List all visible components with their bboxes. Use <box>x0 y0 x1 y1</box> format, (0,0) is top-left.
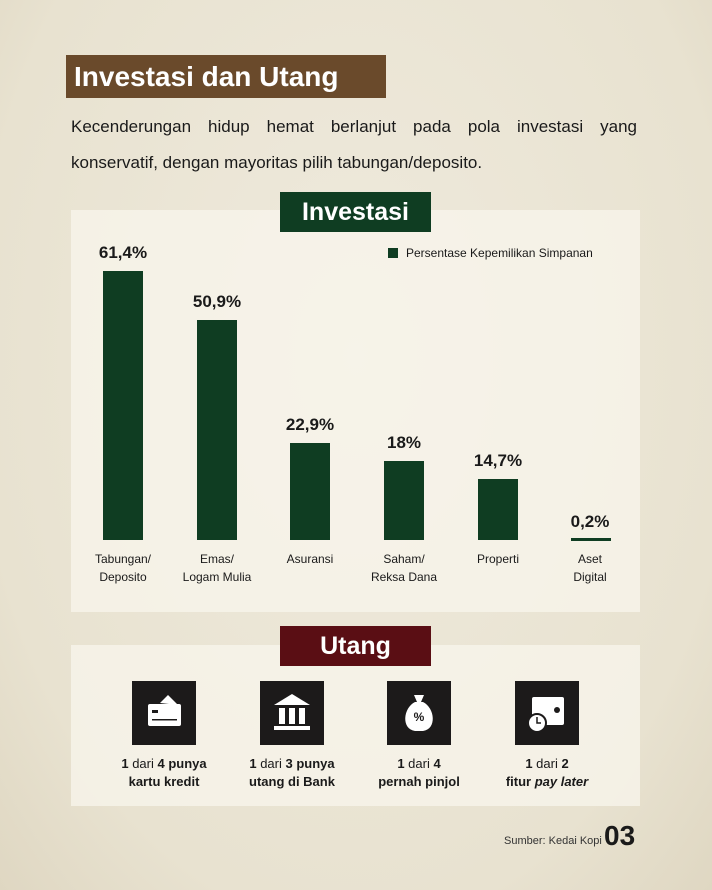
bar chart: Saham/ <box>383 552 425 566</box>
intro text: Kecenderungan hidup hemat berlanjut pada pola investasi yang konservatif, dengan mayoritas pilih tabungan/deposito. <box>71 117 637 172</box>
bar chart: 22,9% <box>286 415 334 434</box>
bar chart: 50,9% <box>193 292 241 311</box>
icon: money bag: % <box>414 710 425 724</box>
bar chart: 18% <box>387 433 421 452</box>
bar chart <box>95 243 611 584</box>
utang stats: pernah pinjol <box>378 774 460 789</box>
bar chart: Asuransi <box>287 552 333 566</box>
bar chart: 61,4% <box>99 243 147 262</box>
heading: investasi: Investasi <box>302 198 409 226</box>
icon: wallet clock <box>515 681 579 745</box>
utang stats: utang di Bank <box>249 774 335 789</box>
utang stats: fitur pay later <box>506 774 588 789</box>
utang stats: 1 dari 3 punya <box>249 756 335 771</box>
heading: utang: Utang <box>320 632 391 660</box>
icon: money bag <box>387 681 451 745</box>
bar chart: Deposito <box>99 570 147 584</box>
source: Sumber: Kedai Kopi <box>504 835 602 847</box>
icon: credit card <box>132 681 196 745</box>
icon: bank <box>260 681 324 745</box>
bar chart: Aset <box>578 552 602 566</box>
bar chart: Reksa Dana <box>371 570 437 584</box>
bar chart: Digital <box>573 570 607 584</box>
heading: investasi <box>280 192 431 232</box>
panel: investasi <box>71 210 640 612</box>
panel: utang <box>71 645 640 806</box>
bar chart: Emas/ <box>200 552 234 566</box>
utang stats: 1 dari 2 <box>525 756 569 771</box>
bar chart: Tabungan/ <box>95 552 151 566</box>
title: Investasi dan Utang <box>74 61 339 92</box>
utang stats <box>121 756 589 789</box>
utang stats: 1 dari 4 punya <box>121 756 207 771</box>
bar chart: Logam Mulia <box>183 570 251 584</box>
bar chart: 0,2% <box>571 512 609 531</box>
heading: utang <box>280 626 431 666</box>
bar chart: Properti <box>477 552 519 566</box>
legend: Persentase Kepemilikan Simpanan <box>406 246 593 260</box>
title <box>66 55 386 98</box>
utang stats: 1 dari 4 <box>397 756 441 771</box>
bar chart: 14,7% <box>474 451 522 470</box>
utang stats: kartu kredit <box>129 774 199 789</box>
page number: 03 <box>604 820 635 851</box>
